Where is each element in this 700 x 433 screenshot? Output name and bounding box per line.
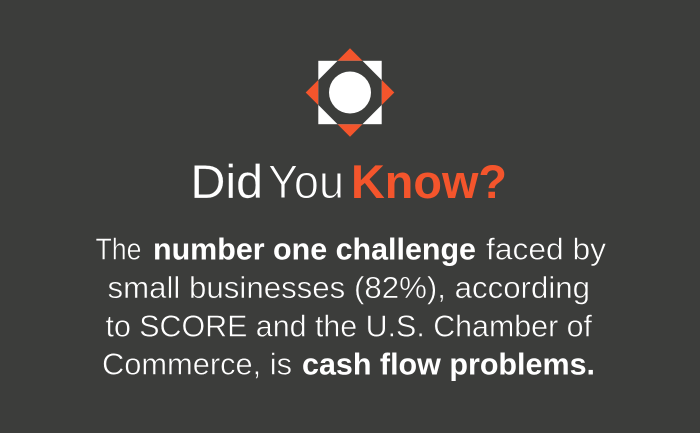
text block: body statement: faced by bbox=[486, 232, 607, 266]
title: Know? bbox=[351, 155, 507, 208]
icon: logo of square, diamond and circle bbox=[306, 48, 394, 137]
text block: body statement bbox=[96, 232, 607, 382]
text block: body statement: small businesses (82%), according bbox=[108, 271, 590, 305]
text block: body statement: number one challenge bbox=[153, 232, 476, 266]
title: Did bbox=[190, 155, 263, 208]
title: You bbox=[268, 155, 344, 208]
text block: body statement: Commerce, is bbox=[102, 348, 292, 382]
text block: body statement: to SCORE and the U.S. Chamber of bbox=[106, 310, 593, 344]
title bbox=[190, 155, 507, 208]
text block: body statement: The bbox=[96, 232, 142, 266]
text block: body statement: cash flow problems. bbox=[302, 348, 595, 382]
